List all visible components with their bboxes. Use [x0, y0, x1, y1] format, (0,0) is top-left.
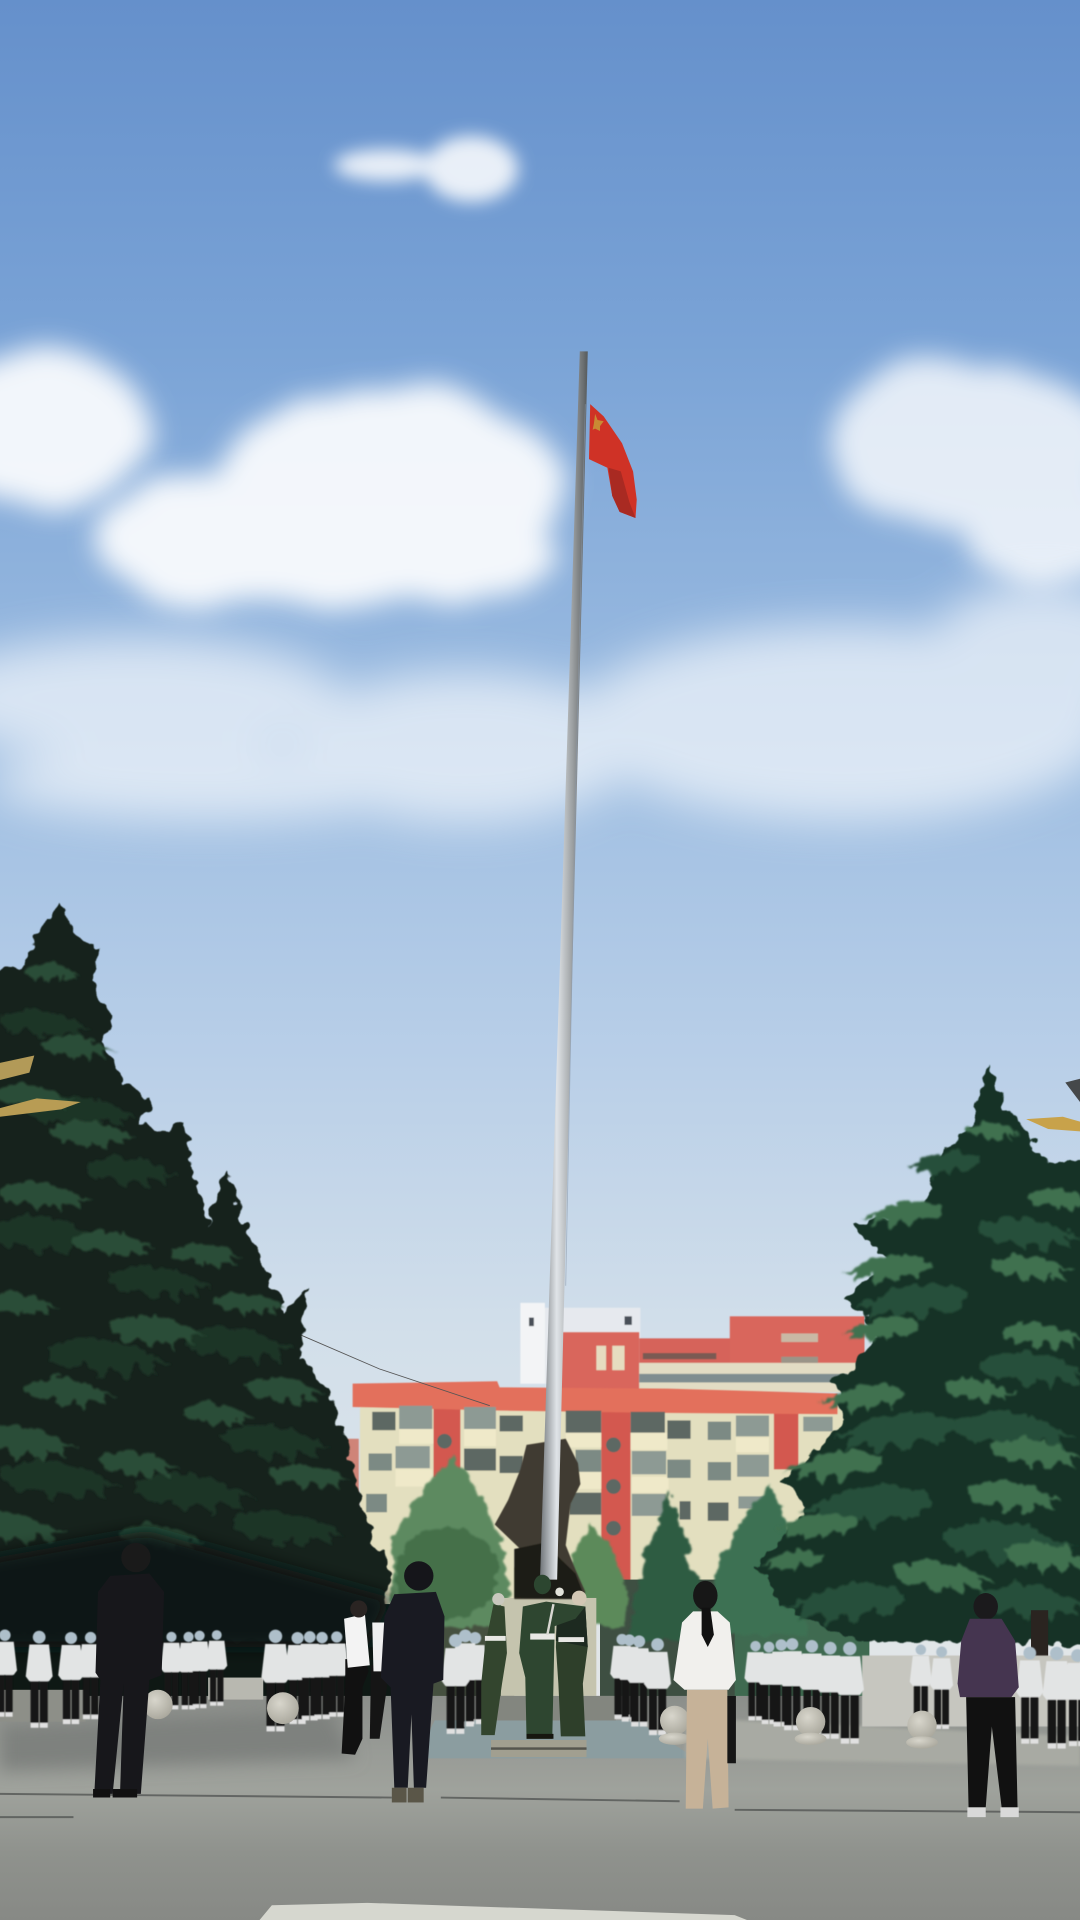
pale path strip at bottom: [260, 1903, 747, 1920]
left tree silhouette: [0, 900, 392, 1641]
right back road light: [686, 1718, 1080, 1766]
wire: [300, 1335, 490, 1406]
halyard: [566, 404, 585, 1286]
back wall and fence at left: [0, 1678, 263, 1722]
stone balls: [143, 1690, 938, 1749]
staff member two: [370, 1622, 387, 1739]
young pine: [629, 1491, 705, 1641]
ground: [0, 1696, 1080, 1920]
trunk: [1031, 1610, 1048, 1665]
far right student row: [744, 1638, 864, 1744]
background white building: [520, 1303, 640, 1384]
soldier left: [481, 1593, 507, 1735]
bronze statue: [495, 1439, 585, 1599]
right pine tree: [757, 1065, 1080, 1665]
tile square: [416, 1720, 696, 1758]
cloud: long pale band: [0, 582, 1080, 823]
soldier centre: [519, 1575, 585, 1739]
shadow lines: [0, 1794, 1080, 1817]
left student row: [0, 1629, 227, 1728]
street lamp: right: [1026, 1079, 1080, 1131]
rear student rows: [0, 1629, 1080, 1749]
leafy tree left of statue: [389, 1455, 511, 1629]
left tree lit branches: [0, 963, 352, 1553]
foreground woman in purple jacket: [958, 1593, 1019, 1817]
backdrop behind the rows: [0, 1580, 869, 1714]
front apartment building: [342, 1381, 845, 1616]
right tree darker branches: [783, 1151, 1080, 1626]
lower canopy shade: [0, 1531, 392, 1647]
windows: [366, 1406, 833, 1536]
red flag: [589, 404, 637, 518]
young tree near right pine: [709, 1484, 808, 1635]
soldier right: [556, 1591, 588, 1736]
leafy tree right of statue: [568, 1521, 627, 1629]
right student row: [610, 1634, 671, 1735]
left back road shade: [0, 1709, 355, 1771]
second student row: [261, 1630, 349, 1731]
statue pedestal: [491, 1598, 616, 1757]
foreground woman in white jacket and beige trousers: [673, 1581, 736, 1809]
student row near the pedestal: [442, 1630, 488, 1734]
cloud: left: [0, 353, 151, 504]
right tree silhouette: [757, 1065, 1080, 1647]
right tree lit branches: [759, 1122, 1080, 1596]
balcony ledges: [396, 1429, 769, 1493]
red columns: [433, 1407, 798, 1616]
cloud: small upper: [334, 136, 518, 202]
cloud: right: [823, 361, 1080, 583]
background red building: [556, 1316, 864, 1392]
street lamp: left: [0, 1056, 81, 1117]
edge students: [910, 1645, 1080, 1749]
honor guard soldiers: [481, 1575, 588, 1739]
foreground man left in dark suit: [93, 1543, 164, 1798]
orange roof: [353, 1381, 838, 1414]
cloud: central large: [94, 388, 563, 609]
wall at right: [862, 1656, 1080, 1727]
left tree darker branches: [0, 1009, 346, 1549]
white-shirt staff walking: [342, 1600, 387, 1755]
flagpole: [540, 351, 588, 1580]
foreground man centre in dark suit: [381, 1561, 444, 1802]
clouds: [0, 136, 1080, 823]
staff member one: [342, 1600, 370, 1755]
left pine trees: [0, 900, 392, 1647]
